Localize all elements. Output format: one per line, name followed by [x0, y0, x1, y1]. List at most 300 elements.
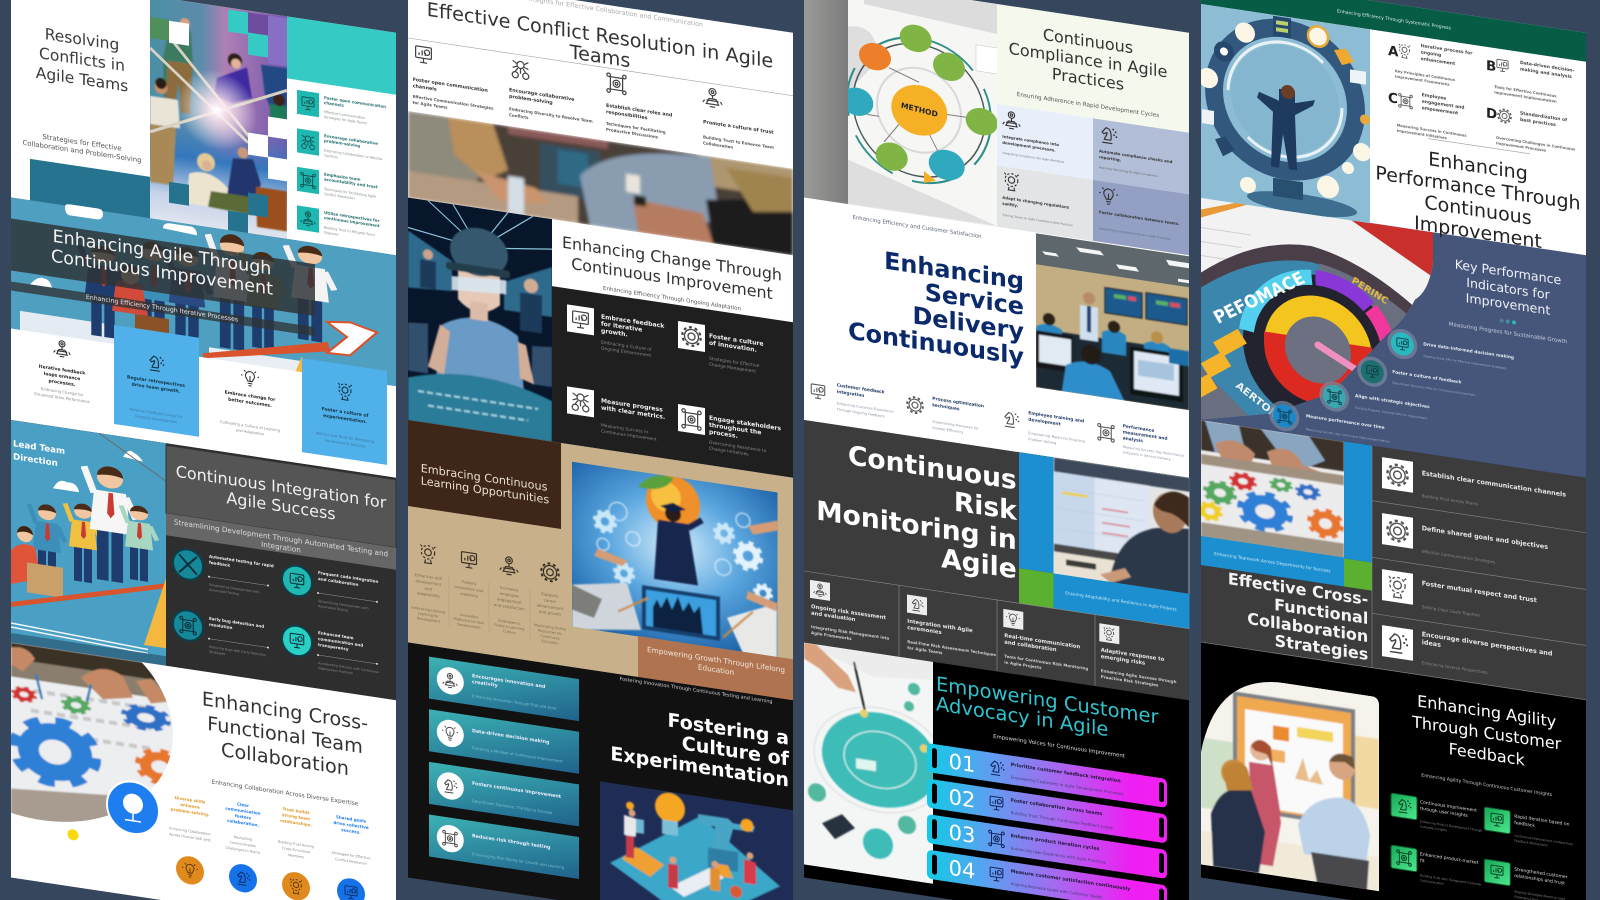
item A: Iterative process: ongoing: [1421, 49, 1441, 59]
title: Enhancing Service Delivery Continuously: Enhancing: [884, 247, 1024, 295]
item: Foster open communication channels: for Agile Teams: [413, 100, 448, 110]
panel: quadrant Automate compliance: [1093, 118, 1189, 194]
item D: Standardization: Standardization of: [1520, 110, 1567, 123]
item: Frequent code integration: Frequent code integration: [318, 570, 378, 584]
item bar: Reduces risk through testing: [429, 814, 579, 879]
icon: yellow dot: [68, 828, 78, 841]
panel: slide Empowering Customer Advocacy in Agile: [804, 642, 1189, 900]
subtitle: Ensuring Adherence in Rapid Development Cycles: [1017, 92, 1159, 119]
panel: quadrant Automate compliance: Automate compliance checks and: [1099, 148, 1173, 164]
item: Establish clear communication channels: Establish clear communication channels: [1422, 469, 1566, 499]
callout: Empowering Growth tagline: [638, 636, 793, 700]
item: Performance measurement and analysis: Performance: [1123, 423, 1154, 434]
title: Continuous Compliance in Agile Practices: Compliance in Agile: [1009, 39, 1167, 81]
subtitle: Enhancing Efficiency Through Systematic Progress: [1337, 8, 1451, 32]
item: Encourage collaborative problem-solving: Embracing Collaboration to Resolve: [324, 148, 383, 161]
item D: Standardization: D: [1486, 105, 1497, 123]
item: Increases engagement: engagement: [497, 596, 522, 605]
item: Automated testing for rapid feedback: Automated Testing: [209, 588, 239, 596]
item: Enhanced team communication: Enhanced team: [318, 630, 354, 640]
image: isometric lab illustration: [600, 781, 793, 900]
item: Integration with Agile ceremonies: [907, 594, 996, 663]
item: Supports career advancement: Continuous: [540, 634, 560, 641]
subtitle: Measuring Progress for Sustainable Growth: [1449, 322, 1568, 345]
item: Employee training and development: Employee training and: [1028, 410, 1084, 425]
item: Enhanced team communication: Accelerating Delivery with Continuous: [318, 661, 379, 674]
item: Foster a culture of experimentation: Foster a culture of: [322, 406, 368, 419]
panel: slide Fostering a Culture of Experimentation: [408, 642, 793, 900]
item bar: Data-driven decision making: Fostering a Mindset of Continuous Improvement: [472, 746, 563, 764]
item D: Standardization: best practices: [1520, 117, 1556, 128]
item: Increases engagement: [494, 555, 525, 637]
panel: quadrant Foster collaboration: Foster collaboration between teams.: [1099, 209, 1180, 226]
item bar 01: Prioritize customer feedback integration: 01: [949, 748, 975, 777]
block: green accent: [1344, 558, 1372, 591]
item: Foster open communication channels: Effective Communication: [324, 110, 365, 120]
item bar 02: Foster collaboration across teams: Building Trust Through Continuous Feedback Loops: [1011, 810, 1113, 830]
item: Foster open communication channels: Foster open communication: [324, 95, 386, 109]
subtitle: Fostering Innovation Through Continuous Testing and Learning: [619, 676, 773, 705]
panel: slide Enhancing Performance Through Continuous Improvement: [1198, 0, 1586, 260]
item: Continuous improvement through user insights: Enhancing Product Development Through: [1420, 819, 1482, 833]
item: Diverse skills: [169, 794, 211, 887]
item: Engage stakeholders: throughout the: [709, 422, 761, 437]
item: Process optimization techniques: techniques: [932, 402, 960, 412]
item: Encourage collaborative problem-solving: [297, 128, 383, 166]
item: Measure performance over time: Measure performance over time: [1306, 413, 1385, 431]
item: Measure progress: Continuous Improvement: [601, 428, 657, 443]
item: Foster open communication channels: channels: [413, 83, 437, 93]
item: Enhances skill development: and: [425, 586, 432, 592]
item: Promote a culture of trust: Building Trust to Enhance Team: [703, 134, 774, 150]
item: Automated testing for rapid feedback: feedback: [209, 560, 230, 568]
item: Performance measurement and analysis: Indicators in Service Delivery: [1123, 450, 1171, 462]
item bar 04: Measure customer satisfaction continuously: Aligning Business Goals with Customer Needs: [1011, 881, 1102, 900]
title: Enhancing Performance Through Continuous Improvement: Enhancing: [1428, 147, 1528, 185]
item: Engage stakeholders: Change Initiatives: [709, 446, 749, 458]
item: Embrace feedback: Ongoing Enhancement: [601, 345, 651, 359]
item A: Iterative process: A: [1388, 43, 1399, 61]
callout: Lead Team Direction: Direction: [13, 452, 58, 469]
item: Supports career advancement: and growth: [539, 609, 562, 617]
item C: Employee engagement: Employee: [1422, 92, 1446, 102]
item: Integration with Agile ceremonies: ceremonies: [907, 625, 942, 636]
panel: slide Continuous Risk Monitoring in Agile: [804, 420, 1190, 700]
item: Foster a culture of experimentation: experimentation.: [323, 413, 367, 425]
item: Real-time communication: Tools for Continuous Risk Monitoring: [1004, 654, 1088, 671]
block: tagline strip: Ensuring Adaptability and Resilience in Agile Projects: [1065, 590, 1177, 612]
image: hands with gears photo: [1201, 420, 1344, 558]
item D: Standardization: [1486, 105, 1576, 157]
item: Foster a culture of innovation: of innovation.: [709, 340, 757, 354]
title: Continuous Risk Monitoring in Agile: Continuous: [848, 440, 1017, 496]
item bar 02: Foster collaboration across teams: 02: [949, 784, 975, 813]
item: Continuous improvement through user insights: Continuous improvement: [1420, 799, 1477, 814]
title: Resolving Conflicts in Agile Teams: Resolving: [45, 25, 119, 54]
item: Enhanced team communication: [282, 624, 379, 679]
item bar 03: Enhance product iteration cycles: Enhance product iteration cycles: [1011, 833, 1100, 852]
item: Regular retrospectives: Iterative Feedback Loops for: [130, 407, 183, 419]
item: Clear communication: Navigating: [234, 835, 252, 842]
panel: quadrant Automate compliance: reporting.: [1099, 154, 1122, 163]
callout: Lead Team Direction: Lead Team: [13, 439, 65, 457]
item: Establish clear roles: Establish clear roles and: [606, 103, 673, 119]
item: Embrace change: better outcomes.: [228, 397, 272, 409]
item: Increases engagement: Foster a Learning: [494, 623, 524, 631]
item: Align with strategic objectives: [1319, 379, 1430, 426]
callout: Empowering Growth tagline: Empowering Growth Through Lifelong: [647, 645, 785, 675]
item: Rapid iteration based on feedback: Rapid iteration based on: [1514, 814, 1570, 828]
item: Automated testing for rapid feedback: [173, 547, 274, 601]
item: Increases engagement: Increases: [500, 585, 519, 593]
title: Enhancing Cross-Functional Team Collaboration: Enhancing Cross-: [202, 687, 368, 735]
item bar: Reduces risk through testing: Reduces risk through testing: [472, 833, 551, 851]
item: Clear communication: fosters: [235, 813, 252, 821]
header: subtitle band: [166, 513, 396, 570]
item bar 02: Foster collaboration across teams: [927, 778, 1167, 843]
item: Adaptive response: Proactive Risk Strategies: [1101, 674, 1159, 688]
title: Continuous Compliance in Agile Practices: Practices: [1052, 64, 1124, 94]
title: Enhancing Change Through Continuous Improvement: Continuous Improvement: [571, 254, 773, 303]
item: Shared goals: success.: [341, 827, 361, 835]
item: Ongoing risk assessment: [810, 580, 889, 647]
label: PERINC dial text: PERINC: [1350, 275, 1390, 307]
item B: Data-driven decision-making: Data-driven decision-: [1520, 60, 1574, 74]
item: Enhanced product-market fit: Communication: [1420, 878, 1444, 886]
item: Engage stakeholders: [678, 404, 781, 462]
item bar 01: Prioritize customer feedback integration: Empowering Customers in Agile Development Processes: [1011, 775, 1124, 796]
subtitle: Collaboration and Problem-Solving: [22, 139, 142, 165]
item: Foster a culture of feedback: Data-Driven Decisions: KPIs for Continuous Enhancement: [1392, 381, 1476, 397]
item: Foster a culture of experimentation: Metrics and Tools for Measuring: [316, 431, 375, 444]
item: Fosters innovation: creativity: [460, 591, 479, 599]
item: Foster open communication channels: Strategies for Agile Teams: [324, 115, 367, 125]
subtitle: Enhancing Efficiency and Customer Satisfaction: [852, 215, 982, 240]
item: Shared goals: Shared goals: [336, 814, 367, 824]
item bar 01: Prioritize customer feedback integration: Prioritize customer feedback integration: [1011, 762, 1121, 785]
image: gears photo in circle: [11, 642, 173, 822]
title: Embracing Continuous Learning Opportunities: Learning Opportunities: [421, 474, 549, 507]
item: Foster open communication channels: Foster open communication: [413, 77, 488, 94]
item: Employee training and development: development: [1028, 417, 1061, 427]
item: Frequent code integration: Automated Testing: [318, 604, 348, 613]
item: Ongoing risk assessment: Integrating Risk Management into: [811, 624, 889, 641]
subtitle: Enhancing Collaboration Across Diverse Expertise: [212, 779, 359, 808]
item: Performance measurement and analysis: measurement and: [1123, 429, 1168, 442]
subtitle: Strategies for Effective: [42, 133, 122, 153]
item: Ongoing risk assessment: Ongoing risk assessment: [811, 604, 886, 621]
item: Foster open communication channels: Effective Communication Strategies: [413, 94, 494, 111]
decoration: three dots: [1500, 318, 1516, 325]
item: Foster a culture of feedback: Foster a culture of feedback: [1392, 369, 1461, 386]
item: Drive data-informed decision making: Drive data-informed decision making: [1423, 341, 1514, 361]
title: Enhancing Agility Through Customer Feedback: Through Customer: [1411, 712, 1562, 754]
item: Increases engagement: and satisfaction: [494, 602, 525, 612]
item: Customer feedback integration: integration: [837, 389, 864, 399]
item: Iterative feedback loops: [34, 337, 90, 404]
item C: Employee engagement: Measuring Success in Continuous: [1397, 123, 1467, 138]
item: Trust builds: Members: [288, 853, 304, 859]
item: Enhanced team communication: transparency: [318, 642, 349, 652]
panel: column 4 of slides: [1190, 0, 1586, 900]
item: Encourage collaborative problem-solving: Conflicts: [324, 153, 338, 160]
item: Frequent code integration: [282, 564, 378, 617]
item: Encourage collaborative problem-solving: [509, 60, 593, 130]
item: Adaptive response: emerging risks: [1101, 654, 1145, 667]
item: Automated testing for rapid feedback: Streamlining Development with: [209, 583, 259, 594]
item: Employee training and development: Problem Solving: [1028, 437, 1056, 445]
image: performance gauge: [1201, 198, 1433, 420]
panel: quadrant Integrate compliance: Integrate compliance into: [1002, 134, 1059, 147]
item bar: Encourages innovation: creativity: [472, 679, 499, 689]
title: Enhancing Agility Through Customer Feedback: Enhancing Agility: [1417, 692, 1557, 731]
item: Promote a culture of trust: Collaboration: [703, 140, 733, 150]
item: Fosters innovation: Platforms for Skill: [454, 617, 484, 625]
item: Employee training and development: [1005, 407, 1085, 450]
title: Enhancing Service Delivery Continuously: Delivery: [912, 301, 1024, 346]
title: Effective Cross-Functional Collaboration Strategies: Effective Cross-: [1228, 569, 1368, 609]
item B: Data-driven decision-making: Improvement Implementation: [1494, 91, 1557, 104]
item bar: Data-driven decision making: [429, 709, 579, 774]
item B: Data-driven decision-making: B: [1486, 58, 1496, 75]
item: Enhanced team communication: Deployment Practices: [318, 666, 353, 675]
item: Early bug detection: [173, 608, 269, 663]
panel: four feature columns: [11, 310, 396, 478]
item: Enhanced team communication: communication and: [318, 636, 363, 648]
item: Frequent code integration: and collaboration: [318, 576, 358, 587]
item: Drive data-informed decision making: Aligning Goals: KPIs for Effective Improvement Strategies: [1423, 354, 1507, 370]
item: Establish clear roles: [606, 73, 673, 142]
item: Early bug detection: Early bug detection and: [209, 616, 264, 629]
panel: slide Key Performance Indicators for Improvement: [1190, 196, 1586, 478]
item: Promote a culture of trust: [703, 87, 774, 156]
title: Key Performance Indicators for Improvement: Key Performance: [1455, 257, 1561, 288]
subtitle: Enhancing Efficiency Through Iterative Processes: [86, 294, 238, 324]
item: Frequent code integration: Streamlining Development with: [318, 599, 368, 611]
item: Rapid iteration based on feedback: [1484, 807, 1573, 851]
item: Define shared goals: Define shared goals and objectives: [1422, 524, 1548, 551]
item: Trust builds: relationships.: [280, 818, 312, 828]
item: Clear communication: Clear: [237, 801, 250, 808]
item: Embrace feedback: growth.: [601, 327, 628, 338]
item: Ongoing risk assessment: Agile Frameworks: [811, 630, 852, 641]
item: Supports career advancement: Education: [541, 639, 559, 646]
item bar: Fosters continuous improvement: Fosters continuous improvement: [472, 781, 562, 800]
item: Shared goals: [332, 814, 370, 900]
item bar 02: Foster collaboration across teams: Foster collaboration across teams: [1011, 798, 1103, 817]
title: Effective Cross-Functional Collaboration Strategies: Strategies: [1275, 631, 1368, 664]
item: Enhanced product-market fit: [1391, 845, 1482, 892]
title: Continuous Risk Monitoring in Agile: Risk: [954, 487, 1018, 527]
title: Continuous Risk Monitoring in Agile: Agile: [941, 543, 1017, 585]
item: Emphasize team accountability and trust: Emphasize team: [324, 171, 360, 182]
item: Automated testing for rapid feedback: Automated testing for rapid: [209, 554, 274, 568]
item bar 04: Measure customer satisfaction continuously: [927, 849, 1167, 900]
item D: Standardization: Overcoming Challenges in Continuous: [1496, 136, 1576, 152]
image: hand drawing teal diagram: [804, 642, 933, 884]
item: Enhances skill development: adaptability: [417, 590, 441, 599]
item: Trust builds: Trust builds: [282, 806, 310, 815]
item: Integration with Agile ceremonies: Integration with Agile: [907, 619, 973, 634]
item: Early bug detection: resolution: [209, 622, 232, 630]
item: Clear communication: communication: [225, 806, 261, 816]
icon: blue globe badge: [107, 778, 159, 838]
item: Establish clear communication channels: Building Trust Across Teams: [1422, 493, 1478, 507]
item: Enhances skill development: Embracing Lifelong: [412, 606, 445, 615]
item: Process optimization techniques: Streamlining Processes for: [932, 420, 979, 431]
item: Encourage collaborative problem-solving: problem-solving: [324, 138, 360, 148]
item: Diverse skills: Enhancing Collaboration: [169, 826, 211, 836]
title: Continuous Risk Monitoring in Agile: Monitoring in: [816, 495, 1017, 556]
item bar: Reduces risk through testing: Encouraging Risk-Taking for Growth and Learning: [472, 852, 565, 870]
band: gray shadow margin: [804, 0, 848, 204]
item: Trust builds: Cross-Functional: [282, 846, 310, 854]
title: Effective Conflict Resolution in Agile Teams: Teams: [569, 40, 630, 72]
panel: column 1 of slides: [11, 0, 396, 900]
item: Enhances skill development: Learning for: [418, 611, 439, 619]
item: Fosters innovation: Development: [457, 622, 481, 630]
item: Regular retrospectives: Ongoing Development: [135, 414, 177, 424]
item: Performance measurement and analysis: [1098, 420, 1184, 463]
item: Embrace feedback: Embracing a Culture of: [601, 339, 652, 353]
item: Fosters innovation: Innovative: [460, 613, 478, 620]
item A: Iterative process: Iterative process for: [1421, 43, 1473, 57]
panel: teal header block: [287, 16, 396, 95]
item: Real-time communication: in Agile Projects: [1004, 660, 1042, 670]
title: Enhancing Cross-Functional Team Collaboration: Collaboration: [221, 738, 349, 780]
panel: quadrant Automate compliance: Real-time Monitoring for Agile Compliance: [1099, 165, 1158, 178]
title: Key Performance Indicators for Improvement: Improvement: [1466, 290, 1550, 318]
panel: column 2 of slides: [408, 0, 793, 900]
panel: slide Resolving Conflicts in Agile Teams: [11, 0, 396, 256]
item: Measure progress: [567, 386, 665, 444]
title: Effective Cross-Functional Collaboration Strategies: Collaboration: [1247, 609, 1368, 646]
item: Establish clear roles: Productive Discussions: [606, 127, 659, 140]
item: Rapid iteration based on feedback: Feedback Mechanisms: [1514, 839, 1548, 848]
item B: Data-driven decision-making: making and analysis: [1520, 66, 1572, 80]
item: Foster a culture of innovation: Change Management: [709, 362, 756, 375]
item: Customer feedback integration: Enhancing Customer Experience: [837, 401, 893, 414]
item: Establish clear roles: responsibilities: [606, 109, 648, 121]
item: Embrace feedback: Embrace feedback: [601, 313, 665, 330]
item: Enhanced product-market fit: Enhanced product-market: [1420, 851, 1479, 866]
item: Utilize retrospectives for continuous improvement: Utilize retrospectives for: [324, 210, 379, 223]
item: Increases engagement: employee: [500, 591, 519, 599]
title: Continuous Integration for Agile Success: Continuous Integration for: [176, 462, 387, 512]
item bar: Encourages innovation: Encourages innovation and: [472, 673, 546, 690]
item: Early bug detection: Strategies: [209, 650, 226, 656]
title: Enhancing Agile Through Continuous Improvement: Continuous Improvement: [51, 247, 273, 300]
item C: Employee engagement: Improvement Initiatives: [1397, 129, 1448, 140]
panel: quadrant Adapt to changing regulations: swiftly.: [1002, 201, 1019, 208]
item: Increases engagement: Culture: [503, 629, 516, 635]
block: tagline strip: Enhancing Teamwork Across Departments for Success: [1214, 551, 1331, 575]
item: Emphasize team accountability and trust: Conflict Resolution: [324, 192, 355, 201]
panel: quadrant Integrate compliance: Integrating Compliance into Agile Workflows: [1002, 151, 1065, 164]
item: Enhanced product-market fit: Building Trust with Transparent Customer: [1420, 873, 1482, 887]
item: Measure progress: Measure progress: [601, 397, 663, 414]
subtitle: Enhancing Agility Through Continuous Customer Insights: [1421, 773, 1553, 798]
title: Fostering a Culture of Experimentation: Culture of: [682, 732, 790, 771]
title: Effective Conflict Resolution in Agile Teams: Effective Conflict Resolution in Agile: [427, 0, 773, 73]
item B: Data-driven decision-making: [1486, 55, 1574, 107]
item bar: Fosters continuous improvement: Data-Driven Decisions: The Key to Success: [472, 799, 552, 815]
image: team on arrow illustration: [20, 197, 377, 396]
item: Diverse skills: Diverse skills: [175, 795, 206, 805]
item: Strengthened customer relationships: [1484, 859, 1568, 900]
title: Effective Cross-Functional Collaboration Strategies: Functional: [1274, 595, 1368, 628]
panel: slide Effective Cross-Functional Collaboration Strategies: [1199, 420, 1586, 700]
item C: Employee engagement: engagement and: [1422, 99, 1465, 111]
item A: Iterative process: Improvement Frameworks: [1395, 75, 1450, 87]
item: Engage stakeholders: Overcoming Resistance to: [709, 440, 767, 454]
image: service control room photo: [1036, 233, 1189, 410]
item: Ongoing risk assessment: and evaluation: [811, 611, 856, 623]
item: Diverse skills: problem-solving.: [171, 806, 210, 817]
panel: quadrant Adapt to changing regulations: Adapt to changing regulations: [1002, 195, 1070, 210]
panel: slide Enhancing Agile Through Continuous Improvement: [11, 196, 396, 478]
item: Encourage diverse perspectives: Embracing Diverse Perspectives: [1422, 660, 1488, 675]
title: Enhancing Performance Through Continuous Improvement: Performance Through: [1375, 161, 1581, 215]
title: Enhancing Service Delivery Continuously: Service: [925, 278, 1024, 321]
item: Supports career advancement: career: [544, 597, 557, 604]
item: Trust builds: strong team: [282, 812, 310, 821]
item: Iterative feedback loops: loops enhance: [44, 371, 80, 382]
item: Foster a culture of innovation: Strategies for Effective: [709, 356, 760, 369]
item: Emphasize team accountability and trust: [297, 167, 378, 204]
item: Performance measurement and analysis: analysis: [1123, 435, 1143, 444]
panel: slide Effective Conflict Resolution in Agile Teams: [408, 0, 793, 256]
item A: Iterative process: [1388, 38, 1473, 90]
image: method cycle diagram: [848, 0, 997, 226]
item: Fosters innovation: Fosters: [462, 579, 476, 586]
item: Continuous improvement through user insights: [1391, 793, 1482, 838]
subtitle: Enhancing Efficiency Through Ongoing Adaptation: [603, 286, 741, 313]
label: AERTON dial text: AERTON: [1233, 380, 1280, 421]
item: Utilize retrospectives for continuous improvement: continuous improvement: [324, 215, 380, 228]
image: method cycle diagram: METHOD: [900, 101, 938, 119]
item: Supports career advancement: Maximizing Online: [534, 623, 566, 632]
header: brown title block: [408, 420, 561, 529]
item: Embrace change: and Adaptation: [236, 428, 265, 437]
title: Enhancing Performance Through Continuous Improvement: Continuous: [1424, 191, 1532, 230]
item: Iterative feedback loops: Enhanced Team Performance: [34, 391, 90, 404]
item: Trust builds: [278, 806, 314, 900]
item bar: Fosters continuous improvement: [429, 762, 579, 826]
item bar: Encourages innovation: Enhancing Innovation Through Trial and Error: [472, 694, 557, 711]
panel: slide Continuous Integration for Agile Success: [11, 420, 396, 701]
item: Iterative feedback loops: processes.: [48, 378, 76, 388]
label: PEFOMACE dial text: PEFOMACE: [1210, 268, 1309, 329]
item: Regular retrospectives: Regular retrospectives: [127, 374, 185, 389]
panel: slide Continuous Compliance in Agile Practices: [804, 0, 1189, 255]
item: Real-time communication: and collaboration: [1004, 640, 1057, 653]
item: Regular retrospectives: drive team growth.: [132, 382, 181, 395]
item: Utilize retrospectives for continuous improvement: Disputes: [324, 230, 339, 237]
title: Fostering a Culture of Experimentation: Experimentation: [610, 742, 789, 792]
item: Establish clear communication channels: [1382, 457, 1566, 520]
title: Enhancing Agility Through Customer Feedback: Feedback: [1449, 739, 1525, 770]
item C: Employee engagement: C: [1388, 90, 1398, 108]
item: Supports career advancement: [534, 561, 566, 647]
image: man conducting process wheel: [1201, 4, 1370, 224]
panel: quadrant Integrate compliance: [997, 104, 1093, 180]
item: Encourage collaborative problem-solving: Encourage collaborative: [509, 87, 575, 103]
panel: quadrant Integrate compliance: development processes.: [1002, 140, 1056, 153]
item: Fosters innovation: innovation and: [454, 584, 484, 593]
item: Enhances skill development: [412, 543, 445, 625]
item: Performance measurement and analysis: Measuring Success: Key Performance: [1123, 445, 1184, 458]
